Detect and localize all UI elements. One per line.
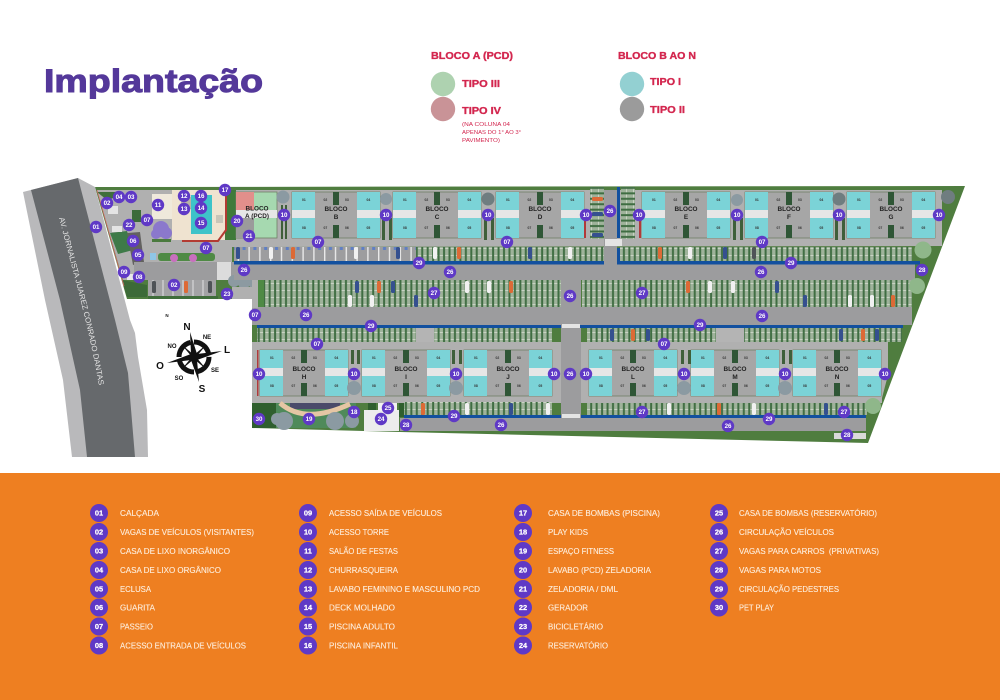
site markers: 10 bbox=[453, 371, 460, 378]
site markers: 23 bbox=[224, 291, 231, 298]
bloco L: BLOCO bbox=[621, 366, 645, 373]
bloco A (PCD): A (PCD) bbox=[245, 213, 269, 220]
key item 21: ZELADORIA / DML bbox=[548, 584, 618, 594]
bloco D: BLOCO bbox=[528, 206, 552, 213]
bloco M: M bbox=[732, 374, 738, 381]
key item 11: SALÃO DE FESTAS bbox=[329, 546, 398, 556]
site markers: 10 bbox=[383, 212, 390, 219]
site markers: 29 bbox=[697, 322, 704, 329]
bloco E: E bbox=[684, 214, 689, 221]
bloco F: 01 02 03 04 bbox=[755, 198, 823, 202]
site markers: 10 bbox=[782, 371, 789, 378]
site markers: 19 bbox=[306, 416, 313, 423]
key item 14 bbox=[299, 598, 396, 616]
bloco J bbox=[464, 350, 552, 396]
bloco G bbox=[847, 192, 935, 238]
key item 05: 05 bbox=[95, 585, 103, 594]
bloco N: BLOCO bbox=[825, 366, 849, 373]
site markers: 04 bbox=[116, 194, 123, 201]
bloco M bbox=[691, 350, 779, 396]
clubhouse and pool deck bbox=[172, 190, 226, 241]
roads bbox=[234, 190, 915, 431]
site markers: 10 bbox=[882, 371, 889, 378]
site markers: 10 bbox=[936, 212, 943, 219]
bloco H bbox=[260, 350, 348, 396]
bloco H: BLOCO bbox=[292, 366, 316, 373]
parking rows bbox=[257, 187, 912, 415]
bloco C: BLOCO bbox=[425, 206, 449, 213]
compass rose: N bbox=[183, 322, 191, 333]
label: tipo I: TIPO I bbox=[650, 76, 681, 88]
compass rose: N bbox=[165, 313, 169, 318]
key item 28: 28 bbox=[715, 566, 723, 575]
pedestrian crossings bbox=[562, 239, 622, 418]
site markers: 27 bbox=[431, 290, 438, 297]
key item 21 bbox=[514, 580, 618, 598]
site markers: 26 bbox=[567, 293, 574, 300]
bloco B: B bbox=[334, 214, 339, 221]
type legend: bloco A bbox=[431, 51, 521, 144]
bloco D: 01 02 03 04 bbox=[506, 198, 574, 202]
key item 13 bbox=[299, 580, 480, 598]
site markers: 05 bbox=[135, 252, 142, 259]
key column 2 bbox=[299, 504, 480, 654]
bloco F: BLOCO bbox=[777, 206, 801, 213]
bloco N: N bbox=[835, 374, 840, 381]
key item 18 bbox=[514, 523, 588, 541]
bloco B bbox=[292, 192, 380, 238]
bicycle rack trees bbox=[228, 275, 258, 289]
green trees bbox=[865, 242, 932, 414]
marker 01 on sidewalk: 01 bbox=[93, 224, 100, 231]
key item 23: BICICLETÁRIO bbox=[548, 622, 604, 632]
title: Implantação bbox=[44, 63, 263, 99]
site markers: 27 bbox=[639, 290, 646, 297]
bloco I: 01 02 03 04 bbox=[372, 356, 440, 360]
key item 01: CALÇADA bbox=[120, 508, 159, 518]
bloco N: 01 02 03 04 bbox=[803, 356, 871, 360]
site markers: 07 bbox=[144, 217, 151, 224]
bloco C bbox=[393, 192, 481, 238]
gap planting strips bbox=[257, 205, 845, 396]
key item 09: ACESSO SAÍDA DE VEÍCULOS bbox=[329, 508, 442, 518]
key item 05: ECLUSA bbox=[120, 584, 151, 594]
site markers: 10 bbox=[836, 212, 843, 219]
key column 1 bbox=[90, 504, 254, 654]
site markers: 07 bbox=[314, 341, 321, 348]
site markers: 27 bbox=[841, 409, 848, 416]
key item 20: LAVABO (PCD) ZELADORIA bbox=[548, 565, 651, 575]
site markers: 10 bbox=[256, 371, 263, 378]
type legend: bloco B ao N bbox=[618, 51, 696, 121]
key item 17: 17 bbox=[519, 509, 527, 518]
bloco H: 01 02 03 04 bbox=[270, 356, 338, 360]
bloco D bbox=[496, 192, 584, 238]
bloco M: 01 02 03 04 bbox=[701, 356, 769, 360]
site markers: 26 bbox=[725, 423, 732, 430]
visitor spaces upper row bbox=[234, 247, 416, 261]
bloco L: 01 02 03 04 bbox=[599, 356, 667, 360]
label: tipo IV: TIPO IV bbox=[462, 105, 501, 117]
bloco E: 01 02 03 04 bbox=[652, 198, 720, 202]
site markers: 27 bbox=[639, 409, 646, 416]
site markers: 26 bbox=[758, 269, 765, 276]
key item 02: VAGAS DE VEÍCULOS (VISITANTES) bbox=[120, 527, 254, 537]
key item 22 bbox=[514, 598, 588, 616]
site markers: 29 bbox=[788, 260, 795, 267]
compass rose: O bbox=[156, 361, 164, 372]
site markers: 16 bbox=[198, 193, 205, 200]
key item 23 bbox=[514, 618, 604, 636]
key item 14: 14 bbox=[304, 603, 313, 612]
bloco C: C bbox=[435, 214, 440, 221]
key item 03: CASA DE LIXO INORGÂNICO bbox=[120, 546, 231, 556]
bloco A (PCD) bbox=[236, 192, 277, 238]
site markers: 10 bbox=[351, 371, 358, 378]
moto parking stripes bbox=[834, 433, 866, 439]
compass rose: NE bbox=[203, 335, 211, 341]
site markers: 07 bbox=[504, 239, 511, 246]
key item 01: 01 bbox=[95, 509, 103, 518]
key item 24 bbox=[514, 636, 609, 654]
bloco C: 01 02 03 04 bbox=[403, 198, 471, 202]
site green base bbox=[95, 186, 965, 443]
key item 08 bbox=[90, 636, 246, 654]
site markers: 07 bbox=[661, 341, 668, 348]
bloco G: 01 02 03 04 bbox=[857, 198, 925, 202]
swatch: tipo III bbox=[431, 72, 455, 96]
key item 01 bbox=[90, 504, 159, 522]
key item 03 bbox=[90, 542, 231, 560]
key item 24: 24 bbox=[519, 641, 528, 650]
bloco N: 08 07 06 05 bbox=[803, 384, 871, 388]
key item 07 bbox=[90, 618, 154, 636]
site markers: 25 bbox=[385, 405, 392, 412]
key item 06: GUARITA bbox=[120, 602, 155, 612]
key item 19: ESPAÇO FITNESS bbox=[548, 546, 614, 556]
bloco B: 01 02 03 04 bbox=[302, 198, 370, 202]
bloco J: BLOCO bbox=[496, 366, 520, 373]
bloco E: BLOCO bbox=[674, 206, 698, 213]
key item 12: CHURRASQUEIRA bbox=[329, 565, 398, 575]
entrance gardens and gate bbox=[97, 190, 147, 297]
bloco I bbox=[362, 350, 450, 396]
swatch: tipo I bbox=[620, 72, 644, 96]
key item 08: ACESSO ENTRADA DE VEÍCULOS bbox=[120, 640, 246, 650]
key item 30: PET PLAY bbox=[739, 602, 774, 612]
site markers: 11 bbox=[155, 202, 162, 209]
site markers: 29 bbox=[368, 323, 375, 330]
key item 11: 11 bbox=[304, 547, 312, 556]
site markers: 26 bbox=[447, 269, 454, 276]
key item 09 bbox=[299, 504, 442, 522]
key item 30: 30 bbox=[715, 603, 723, 612]
note: tipo IV: PAVIMENTO) bbox=[462, 138, 500, 144]
key item 04 bbox=[90, 561, 222, 579]
key item 19: 19 bbox=[519, 547, 527, 556]
bloco J: J bbox=[506, 374, 510, 381]
key item 16: 16 bbox=[304, 641, 312, 650]
access driveway bbox=[134, 262, 234, 280]
heading: bloco B ao N: BLOCO B AO N bbox=[618, 51, 696, 62]
key item 09: 09 bbox=[304, 509, 312, 518]
site markers: 26 bbox=[759, 313, 766, 320]
bloco I: I bbox=[405, 374, 407, 381]
bloco F: F bbox=[787, 214, 791, 221]
site markers: 03 bbox=[128, 194, 135, 201]
pedestrian walkways (blue) bbox=[234, 187, 920, 418]
key item 08: 08 bbox=[95, 641, 103, 650]
key item 12: 12 bbox=[304, 566, 312, 575]
key item 13: 13 bbox=[304, 585, 312, 594]
bloco F: 08 07 06 05 bbox=[755, 226, 823, 230]
key item 29: 29 bbox=[715, 585, 723, 594]
key item 21: 21 bbox=[519, 585, 527, 594]
site markers: 29 bbox=[416, 260, 423, 267]
stairs bbox=[217, 262, 231, 280]
key item 06: 06 bbox=[95, 603, 103, 612]
key item 24: RESERVATÓRIO bbox=[548, 640, 609, 650]
lawn beside clubhouse bbox=[224, 190, 236, 240]
key item 06 bbox=[90, 598, 155, 616]
bloco A (PCD): BLOCO bbox=[245, 206, 269, 212]
bloco B: 08 07 06 05 bbox=[302, 226, 370, 230]
site markers: 18 bbox=[351, 409, 358, 416]
key item 05 bbox=[90, 580, 151, 598]
paved areas bbox=[97, 190, 942, 403]
site markers: 26 bbox=[241, 267, 248, 274]
bloco B: BLOCO bbox=[324, 206, 348, 213]
site markers: 29 bbox=[451, 413, 458, 420]
key item 02: 02 bbox=[95, 528, 103, 537]
key item 17 bbox=[514, 504, 660, 522]
bloco E: 08 07 06 05 bbox=[652, 226, 720, 230]
site markers: 26 bbox=[567, 371, 574, 378]
key item 20: 20 bbox=[519, 566, 527, 575]
key item 26: 26 bbox=[715, 528, 723, 537]
key item 25: 25 bbox=[715, 509, 723, 518]
site markers: 28 bbox=[844, 432, 851, 439]
key item 28: VAGAS PARA MOTOS bbox=[739, 565, 821, 575]
site markers: 24 bbox=[378, 416, 385, 423]
lower amenities: pet play, fitness, play kids bbox=[252, 403, 404, 431]
site markers: 22 bbox=[126, 222, 133, 229]
key item 11 bbox=[299, 542, 398, 560]
compass rose: L bbox=[224, 345, 230, 356]
key item 30 bbox=[710, 598, 774, 616]
key item 10: 10 bbox=[304, 528, 312, 537]
bloco L bbox=[589, 350, 677, 396]
site markers: 10 bbox=[681, 371, 688, 378]
site markers: 07 bbox=[203, 245, 210, 252]
heading: bloco A: BLOCO A (PCD) bbox=[431, 51, 513, 62]
key item 28 bbox=[710, 561, 821, 579]
site markers: 15 bbox=[198, 220, 205, 227]
site markers: 10 bbox=[281, 212, 288, 219]
site markers: 13 bbox=[181, 206, 188, 213]
key item 18: 18 bbox=[519, 528, 527, 537]
site markers bbox=[90, 184, 945, 441]
key item 22: GERADOR bbox=[548, 602, 588, 612]
key item 07: PASSEIO bbox=[120, 622, 154, 632]
key item 22: 22 bbox=[519, 603, 527, 612]
key item 16 bbox=[299, 636, 398, 654]
key item 26: CIRCULAÇÃO VEÍCULOS bbox=[739, 527, 834, 537]
street name: AV. JORNALISTA JUAREZ CONRADO DANTAS bbox=[59, 218, 104, 385]
site markers: 26 bbox=[498, 422, 505, 429]
site markers: 07 bbox=[315, 239, 322, 246]
key item 29: CIRCULAÇÃO PEDESTRES bbox=[739, 584, 839, 594]
marker 01 on sidewalk bbox=[90, 221, 102, 233]
key column 4 bbox=[710, 504, 879, 616]
site markers: 12 bbox=[181, 193, 188, 200]
key item 27: VAGAS PARA CARROS (PRIVATIVAS) bbox=[739, 546, 879, 556]
key item 07: 07 bbox=[95, 622, 103, 631]
bloco M: BLOCO bbox=[723, 366, 747, 373]
salão de festas bbox=[152, 194, 172, 219]
note: tipo IV: APENAS DO 1° AO 3° bbox=[462, 130, 521, 136]
site markers: 08 bbox=[136, 274, 143, 281]
key item 18: PLAY KIDS bbox=[548, 527, 588, 537]
visitor parking bbox=[148, 280, 218, 299]
cars bbox=[152, 197, 895, 415]
swatch: tipo II bbox=[620, 97, 644, 121]
bloco I: BLOCO bbox=[394, 366, 418, 373]
note: tipo IV: (NA COLUNA 04 bbox=[462, 122, 510, 128]
site plan bbox=[90, 184, 965, 443]
bloco G: BLOCO bbox=[879, 206, 903, 213]
site markers: 10 bbox=[485, 212, 492, 219]
bloco H: H bbox=[302, 374, 307, 381]
bloco N bbox=[793, 350, 881, 396]
key item 26 bbox=[710, 523, 834, 541]
reservatório bbox=[364, 410, 399, 431]
key item 10: ACESSO TORRE bbox=[329, 527, 389, 537]
compass rose: NO bbox=[168, 344, 177, 350]
label: tipo III: TIPO III bbox=[462, 78, 500, 90]
key item 04: CASA DE LIXO ORGÂNICO bbox=[120, 565, 222, 575]
bloco G: 08 07 06 05 bbox=[857, 226, 925, 230]
label: tipo II: TIPO II bbox=[650, 104, 685, 116]
site markers: 10 bbox=[551, 371, 558, 378]
key item 10 bbox=[299, 523, 389, 541]
key item 15: PISCINA ADULTO bbox=[329, 622, 396, 632]
key item 03: 03 bbox=[95, 547, 103, 556]
compass rose bbox=[156, 313, 230, 395]
site markers: 21 bbox=[246, 233, 253, 240]
key item 12 bbox=[299, 561, 398, 579]
key item 25: CASA DE BOMBAS (RESERVATÓRIO) bbox=[739, 508, 877, 518]
key item 14: DECK MOLHADO bbox=[329, 602, 396, 612]
key item 27: 27 bbox=[715, 547, 723, 556]
bloco J: 08 07 06 05 bbox=[474, 384, 542, 388]
purple garden tree bbox=[151, 221, 172, 242]
key column 3 bbox=[514, 504, 660, 654]
key item 25 bbox=[710, 504, 877, 522]
site markers: 28 bbox=[403, 422, 410, 429]
site markers: 26 bbox=[607, 208, 614, 215]
site markers: 30 bbox=[256, 416, 263, 423]
bloco F bbox=[745, 192, 833, 238]
site markers: 20 bbox=[234, 218, 241, 225]
site markers: 02 bbox=[171, 282, 178, 289]
key item 15: 15 bbox=[304, 622, 312, 631]
compass rose: S bbox=[199, 384, 206, 395]
key item 16: PISCINA INFANTIL bbox=[329, 640, 398, 650]
key item 29 bbox=[710, 580, 839, 598]
key item 27 bbox=[710, 542, 879, 560]
key item 13: LAVABO FEMININO E MASCULINO PCD bbox=[329, 584, 480, 594]
key item 23: 23 bbox=[519, 622, 527, 631]
entrance lawn with flowers bbox=[150, 253, 215, 262]
bloco L: 08 07 06 05 bbox=[599, 384, 667, 388]
compass rose: SO bbox=[175, 376, 184, 382]
bloco M: 08 07 06 05 bbox=[701, 384, 769, 388]
site markers: 10 bbox=[583, 212, 590, 219]
bloco D: D bbox=[538, 214, 543, 221]
key item 20 bbox=[514, 561, 651, 579]
key item 02 bbox=[90, 523, 254, 541]
site markers: 17 bbox=[222, 187, 229, 194]
site markers: 07 bbox=[759, 239, 766, 246]
site markers: 10 bbox=[583, 371, 590, 378]
key item 19 bbox=[514, 542, 614, 560]
bloco I: 08 07 06 05 bbox=[372, 384, 440, 388]
pool bbox=[191, 195, 212, 234]
site markers: 01 bbox=[93, 224, 100, 231]
site markers: 14 bbox=[198, 205, 205, 212]
key item 17: CASA DE BOMBAS (PISCINA) bbox=[548, 508, 660, 518]
site markers: 29 bbox=[766, 416, 773, 423]
bloco G: G bbox=[889, 214, 894, 221]
site markers: 07 bbox=[252, 312, 259, 319]
site markers: 10 bbox=[734, 212, 741, 219]
site markers: 06 bbox=[130, 238, 137, 245]
swatch: tipo IV bbox=[431, 97, 455, 121]
site markers: 26 bbox=[303, 312, 310, 319]
avenue road bbox=[23, 178, 148, 457]
bloco H: 08 07 06 05 bbox=[270, 384, 338, 388]
key item 15 bbox=[299, 618, 396, 636]
site markers: 09 bbox=[121, 269, 128, 276]
bloco L: L bbox=[631, 374, 635, 381]
key item 04: 04 bbox=[95, 566, 104, 575]
orange key panel bbox=[0, 473, 1000, 700]
site markers: 02 bbox=[104, 200, 111, 207]
bloco D: 08 07 06 05 bbox=[506, 226, 574, 230]
site markers: 28 bbox=[919, 267, 926, 274]
bloco E bbox=[642, 192, 730, 238]
bloco C: 08 07 06 05 bbox=[403, 226, 471, 230]
site markers: 10 bbox=[636, 212, 643, 219]
gray trees bbox=[276, 190, 955, 395]
compass rose: SE bbox=[211, 368, 219, 374]
bloco J: 01 02 03 04 bbox=[474, 356, 542, 360]
